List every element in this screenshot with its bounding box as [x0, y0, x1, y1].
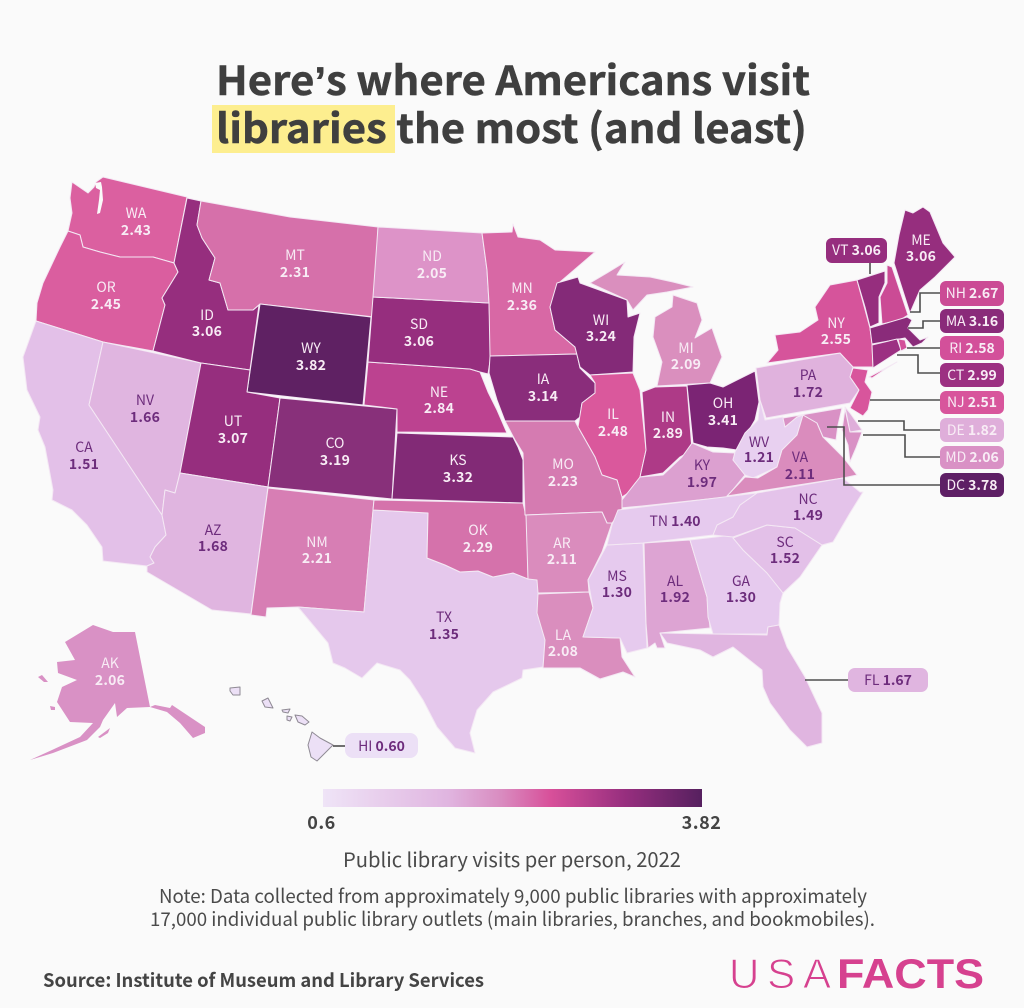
- state: PA: 1.72: [793, 382, 823, 402]
- logo: USAFacts: [729, 950, 984, 997]
- state: SC: SC: [776, 532, 794, 552]
- state: NY: NY: [827, 313, 845, 333]
- state: IA: [489, 354, 595, 421]
- note: Note: Data collected from approximately 9,000 public libraries with approximately: [159, 882, 867, 909]
- state: AR: AR: [553, 533, 571, 553]
- legend: 0.6: [307, 809, 336, 835]
- state: NM: 2.21: [302, 548, 332, 568]
- state: GA: [690, 535, 783, 634]
- state: WA: WA: [126, 203, 147, 223]
- state: AK: AK: [101, 653, 119, 673]
- state: NM: [251, 488, 374, 617]
- callout: FL: FL 1.67: [864, 670, 912, 690]
- state: MT: 2.31: [280, 262, 310, 282]
- state: OH: OH: [713, 393, 733, 413]
- state: VA: [727, 415, 857, 496]
- state: GA: 1.30: [726, 587, 756, 607]
- state: VT: [857, 271, 885, 327]
- state: SD: [368, 297, 491, 374]
- legend: [307, 789, 721, 873]
- state: CO: [268, 398, 397, 499]
- state: SC: [733, 525, 822, 593]
- state: UT: UT: [224, 411, 242, 431]
- state: OR: 2.45: [91, 294, 121, 314]
- state: IN: 2.89: [653, 423, 683, 443]
- state: PA: [756, 353, 859, 418]
- state: CT: [872, 339, 901, 368]
- state: MI: MI: [678, 338, 694, 358]
- state: LA: 2.08: [548, 641, 578, 661]
- state: TN: TN 1.40: [650, 511, 700, 531]
- state: NC: NC: [798, 489, 818, 509]
- state: MS: 1.30: [602, 582, 632, 602]
- state: MS: MS: [607, 566, 627, 586]
- state: IA: IA: [537, 369, 550, 389]
- map of US states: [23, 177, 955, 761]
- state: NE: 2.84: [424, 398, 454, 418]
- state: KS: 3.32: [443, 467, 473, 487]
- state: NJ: [850, 368, 872, 416]
- title: libraries the most (and least): [216, 97, 807, 155]
- callout: NJ: NJ 2.51: [947, 392, 997, 412]
- state: MO: MO: [552, 454, 574, 474]
- state: WV: 1.21: [744, 447, 774, 467]
- state: UT: [180, 363, 280, 487]
- state: OH: 3.41: [708, 410, 738, 430]
- legend: Public library visits per person, 2022: [343, 844, 681, 873]
- state: NC: 1.49: [793, 505, 823, 525]
- state: WV: [733, 400, 803, 478]
- state: IL: 2.48: [598, 421, 628, 441]
- state: ND: 2.05: [417, 263, 447, 283]
- state: FL: [660, 625, 822, 747]
- state: ND: ND: [422, 246, 442, 266]
- callout: MA: MA 3.16: [946, 311, 998, 331]
- state: AZ: AZ: [205, 520, 221, 540]
- state: AR: 2.11: [547, 549, 577, 569]
- callout: HI: HI 0.60: [358, 736, 405, 756]
- state: MT: [197, 201, 378, 317]
- state: TX: [298, 510, 545, 753]
- state: NH: [880, 265, 908, 324]
- state: NE: NE: [430, 382, 448, 402]
- state: IA: 3.14: [528, 386, 558, 406]
- state: NM: NM: [306, 532, 328, 552]
- state: MN: MN: [511, 278, 533, 298]
- state: OK: OK: [468, 520, 488, 540]
- state: NY: 2.55: [821, 329, 851, 349]
- state: WA: [68, 177, 187, 263]
- state: NE: [364, 362, 507, 433]
- state: AZ: 1.68: [198, 536, 228, 556]
- state: UT: 3.07: [218, 428, 248, 448]
- callout: DE: [940, 418, 1004, 442]
- state: OR: OR: [96, 277, 116, 297]
- state: WI: 3.24: [586, 326, 616, 346]
- state: VA: 2.11: [785, 464, 815, 484]
- state: WI: WI: [593, 310, 609, 330]
- source: Source: Institute of Museum and Library Services: [43, 966, 484, 993]
- logo: USAFacts: USA: [729, 950, 831, 997]
- state: ME: ME: [911, 230, 931, 250]
- callout: DE: DE 1.82: [947, 420, 997, 440]
- state: KY: [620, 443, 745, 508]
- callout: HI: [345, 733, 418, 758]
- state: TX: 1.35: [429, 624, 459, 644]
- state: AZ: [147, 473, 268, 614]
- leader lines: [333, 263, 940, 746]
- state: AK: [30, 625, 205, 760]
- callout: CT: [940, 363, 1004, 387]
- callout: CT: CT 2.99: [947, 365, 997, 385]
- state: HI: [230, 687, 333, 761]
- callout: VT: VT 3.06: [832, 240, 881, 260]
- callout: VT: [826, 238, 887, 263]
- state: NY: [767, 280, 897, 378]
- state: AR: [526, 512, 612, 593]
- state: PA: PA: [800, 365, 817, 385]
- state: CA: CA: [75, 437, 93, 457]
- state: MN: 2.36: [507, 295, 537, 315]
- state: KS: [392, 433, 523, 503]
- state: CA: 1.51: [69, 454, 99, 474]
- legend: 3.82: [682, 809, 721, 835]
- state: WY: 3.82: [296, 355, 326, 375]
- state: OR: [36, 231, 178, 351]
- state: CO: 3.19: [320, 450, 350, 470]
- state: MS: [583, 543, 647, 653]
- state: WI: [550, 277, 640, 375]
- state: IL: [578, 373, 646, 497]
- state: NV: [89, 342, 201, 515]
- state: NV: NV: [136, 390, 155, 410]
- state: NV: 1.66: [130, 407, 160, 427]
- state: OK: [373, 500, 528, 579]
- state: NC: [713, 478, 863, 545]
- callout: NJ: [940, 391, 1004, 414]
- note: 17,000 individual public library outlets (main libraries, branches, and bookmobiles).: [150, 905, 875, 932]
- state: WY: WY: [301, 338, 321, 358]
- note: [150, 882, 875, 932]
- title: Here’s where Americans visit: [216, 49, 810, 107]
- state: MI: [590, 262, 722, 386]
- state: IL: IL: [607, 404, 619, 424]
- state: MO: [505, 421, 622, 523]
- callout: RI: RI 2.58: [949, 338, 995, 358]
- state: AL: [644, 540, 710, 648]
- state: OH: [687, 371, 759, 450]
- state: AL: AL: [667, 571, 683, 591]
- callout: NH: NH 2.67: [946, 283, 998, 303]
- state: KS: KS: [449, 450, 467, 470]
- state: WA: 2.43: [121, 220, 151, 240]
- callout: FL: [848, 668, 928, 692]
- state: CO: CO: [326, 433, 344, 453]
- state: ND: [373, 227, 489, 303]
- state: RI: [898, 339, 907, 351]
- state: AL: 1.92: [660, 587, 690, 607]
- title: [212, 49, 810, 155]
- callout: NH: [940, 281, 1004, 306]
- state: VA: VA: [792, 447, 809, 467]
- state: GA: GA: [732, 571, 751, 591]
- state: WY: [247, 304, 371, 405]
- state: TN: [607, 493, 757, 545]
- state: SC: 1.52: [770, 548, 800, 568]
- state: CA: [23, 321, 166, 566]
- state: KY: KY: [694, 455, 711, 475]
- callout: DC: [940, 473, 1004, 497]
- state: ID: [153, 198, 259, 370]
- callout: MD: MD 2.06: [945, 447, 999, 467]
- state: MI: 2.09: [671, 354, 701, 374]
- state: MO: 2.23: [548, 471, 578, 491]
- state: MT: MT: [285, 245, 305, 265]
- callout: DC: DC 3.78: [946, 475, 998, 495]
- callout: MA: [940, 309, 1004, 333]
- state: IN: [640, 386, 692, 477]
- state: DE: [845, 407, 862, 432]
- callout: RI: [940, 336, 1004, 360]
- state: LA: LA: [555, 625, 572, 645]
- state: SD: SD: [410, 314, 428, 334]
- state: MD: [783, 408, 862, 462]
- state: ID: 3.06: [192, 321, 222, 341]
- state: OK: 2.29: [463, 537, 493, 557]
- state: WV: WV: [749, 432, 770, 452]
- state: LA: [537, 592, 635, 679]
- state: ME: 3.06: [906, 246, 936, 266]
- state: KY: 1.97: [687, 472, 717, 492]
- state: TX: TX: [436, 607, 452, 627]
- state: IN: IN: [661, 407, 675, 427]
- logo: USAFacts: FACTS: [837, 950, 984, 997]
- state: ID: ID: [200, 305, 214, 325]
- state: AK: 2.06: [95, 670, 125, 690]
- state: MN: [482, 224, 595, 356]
- state: SD: 3.06: [404, 331, 434, 351]
- state: ME: [894, 207, 955, 313]
- state: MA: [870, 317, 928, 347]
